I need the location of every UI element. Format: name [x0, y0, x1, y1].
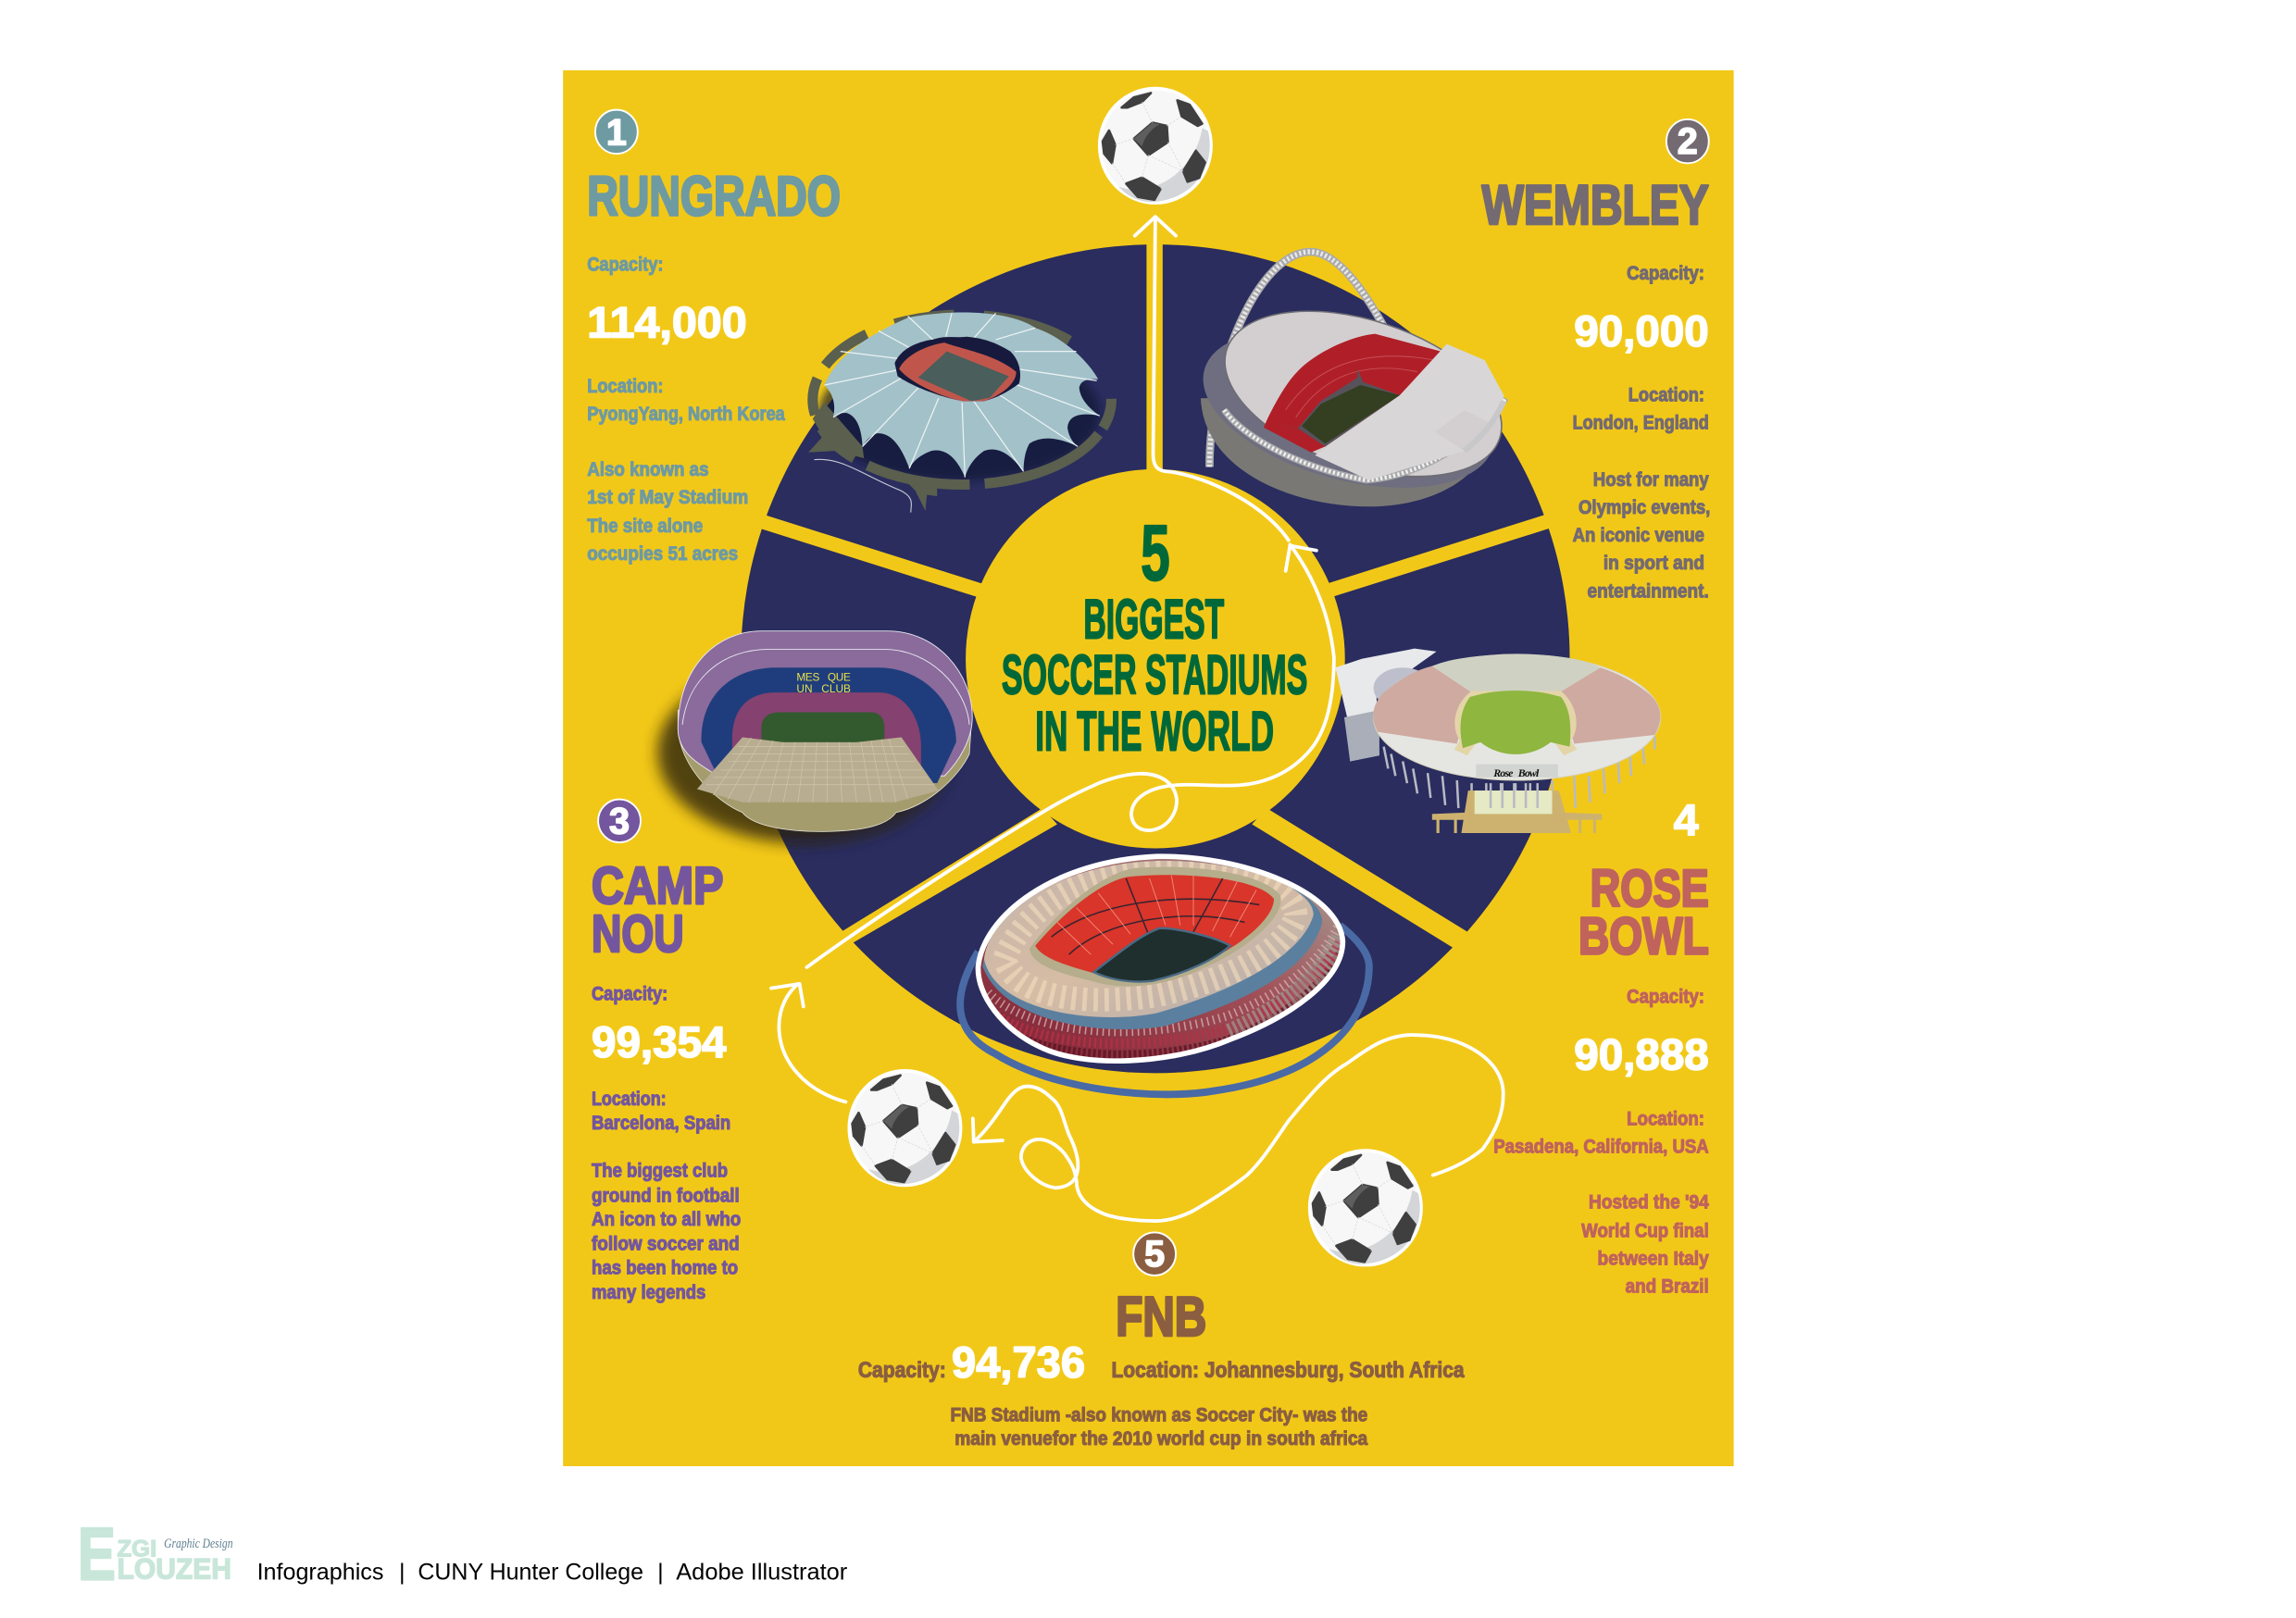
logo: Ezgi Louzeh Graphic Design: Graphic Design [164, 1537, 232, 1551]
text block: Rose Bowl: and Brazil [1626, 1276, 1709, 1298]
stadium illustration: Camp Nou: MES QUE [796, 670, 851, 683]
stadium illustration: FNB [960, 856, 1369, 1094]
number badge 1 [595, 110, 638, 154]
arrow: path through centre to left ball [806, 544, 1334, 967]
text block: Wembley [1482, 119, 1710, 602]
text block: Camp Nou: ground in football [592, 1185, 740, 1207]
text block: Wembley: Location: [1628, 383, 1704, 405]
stadium illustration: Wembley [1186, 252, 1522, 517]
text block: Rungrado [587, 110, 841, 565]
text block: Wembley: Olympic events, [1578, 496, 1710, 518]
text block: Rungrado: PyongYang, North Korea [587, 403, 785, 425]
text block: Camp Nou: An icon to all who [592, 1208, 741, 1230]
number badge 2 [1666, 119, 1709, 163]
stadium illustration: Camp Nou [657, 631, 972, 843]
text block: Wembley: WEMBLEY [1482, 174, 1709, 236]
text block: Wembley: entertainment. [1587, 579, 1709, 602]
text block: Rungrado: Also known as [587, 458, 709, 480]
text block: FNB: main venuefor the 2010 world cup in south africa [955, 1427, 1367, 1450]
arrow: looping path from right ball to left ball [973, 1035, 1504, 1221]
text block: Rose Bowl: between Italy [1598, 1248, 1709, 1270]
logo: Ezgi Louzeh Graphic Design: E [78, 1513, 116, 1597]
text block: Camp Nou: Capacity: [592, 983, 668, 1005]
stadium illustration: Rose Bowl [1335, 649, 1661, 833]
soccer ball: left [849, 1071, 961, 1185]
logo: Ezgi Louzeh Graphic Design [78, 1513, 232, 1597]
infographic canvas [81, 70, 1734, 1585]
text block: Rungrado: 1st of May Stadium [587, 486, 748, 508]
logo: Ezgi Louzeh Graphic Design: ZGI [118, 1536, 156, 1562]
text block: Rose Bowl: Location: [1627, 1107, 1704, 1129]
text block: Rungrado: Location: [587, 375, 663, 397]
text block: Wembley: Capacity: [1627, 262, 1704, 284]
text block: Rose Bowl [1493, 796, 1709, 1298]
logo: Ezgi Louzeh Graphic Design: LOUZEH [118, 1552, 231, 1586]
text block: Wembley: Host for many [1593, 468, 1709, 491]
text block: FNB: 94,736 [952, 1338, 1085, 1388]
text block: FNB: Location: Johannesburg, South Africa [1111, 1359, 1465, 1383]
text block: Camp Nou [592, 800, 741, 1303]
text block: Rose Bowl: BOWL [1578, 907, 1709, 966]
footer caption: Infographics [257, 1560, 383, 1586]
title [1002, 509, 1307, 763]
stadium illustration: Rose Bowl: Rose Bowl [1492, 766, 1540, 779]
text block: Wembley: An iconic venue [1573, 524, 1704, 546]
stadium illustration: Camp Nou: UN CLUB [796, 682, 851, 695]
soccer ball: right [1310, 1151, 1421, 1265]
arrow: path up to first ball [1135, 217, 1289, 541]
footer caption: CUNY Hunter College [418, 1560, 643, 1586]
text block: Camp Nou: has been home to [592, 1257, 738, 1279]
text block: Camp Nou: The biggest club [592, 1160, 728, 1182]
text block: Rungrado: occupies 51 acres [587, 542, 738, 565]
number badge 2: 2 [1678, 121, 1698, 162]
title: BIGGEST [1083, 589, 1224, 651]
text block: FNB: FNB Stadium -also known as Soccer City- was the [950, 1404, 1367, 1426]
number badge 1: 1 [606, 113, 627, 154]
text block: Wembley: in sport and [1603, 552, 1704, 574]
text block: Camp Nou: CAMP [592, 856, 723, 915]
text block: Rose Bowl: Pasadena, California, USA [1493, 1136, 1709, 1158]
text block: Camp Nou: Barcelona, Spain [592, 1112, 730, 1134]
text block: FNB: FNB [1116, 1286, 1206, 1348]
text block: Rose Bowl: World Cup final [1581, 1219, 1709, 1241]
text block: Rose Bowl: Capacity: [1627, 985, 1704, 1007]
footer caption: | [657, 1560, 664, 1586]
title: IN THE WORLD [1035, 701, 1274, 763]
number badge 5: 5 [1144, 1234, 1165, 1275]
footer caption: | [399, 1560, 406, 1586]
title: SOCCER STADIUMS [1002, 644, 1307, 706]
text block: Camp Nou: NOU [592, 904, 684, 964]
text block: Rose Bowl: 90,888 [1574, 1031, 1709, 1080]
text block: Wembley: London, England [1573, 411, 1709, 433]
text block: Rose Bowl: ROSE [1591, 859, 1709, 918]
soccer ball: top [1100, 89, 1211, 203]
text block: Rungrado: 114,000 [587, 299, 747, 348]
footer caption [257, 1560, 847, 1586]
text block: Camp Nou: 99,354 [592, 1018, 727, 1067]
text block: Camp Nou: Location: [592, 1088, 667, 1110]
text block: Rungrado: The site alone [587, 515, 703, 537]
text block: Camp Nou: many legends [592, 1281, 705, 1303]
chart: five-segment navy wheel [741, 234, 1570, 1073]
title: 5 [1141, 509, 1170, 597]
text block: FNB [858, 1232, 1465, 1450]
number badge 3 [598, 800, 641, 842]
arrow: curve from left ball up to the wheel [771, 984, 845, 1101]
number badge 5 [1133, 1232, 1176, 1276]
text block: FNB: Capacity: [858, 1359, 946, 1383]
stadium illustration: Rungrado [808, 313, 1111, 513]
text block: Rungrado: Capacity: [587, 254, 663, 276]
text block: Camp Nou: follow soccer and [592, 1233, 740, 1255]
panel: yellow poster background [563, 70, 1734, 1466]
number badge 3: 3 [609, 802, 630, 842]
text block: Rungrado: RUNGRADO [587, 165, 841, 227]
number 4: 4 [1674, 796, 1699, 845]
text block: Wembley: 90,000 [1574, 307, 1709, 356]
footer caption: Adobe Illustrator [676, 1560, 847, 1586]
text block: Rose Bowl: Hosted the '94 [1589, 1191, 1709, 1214]
